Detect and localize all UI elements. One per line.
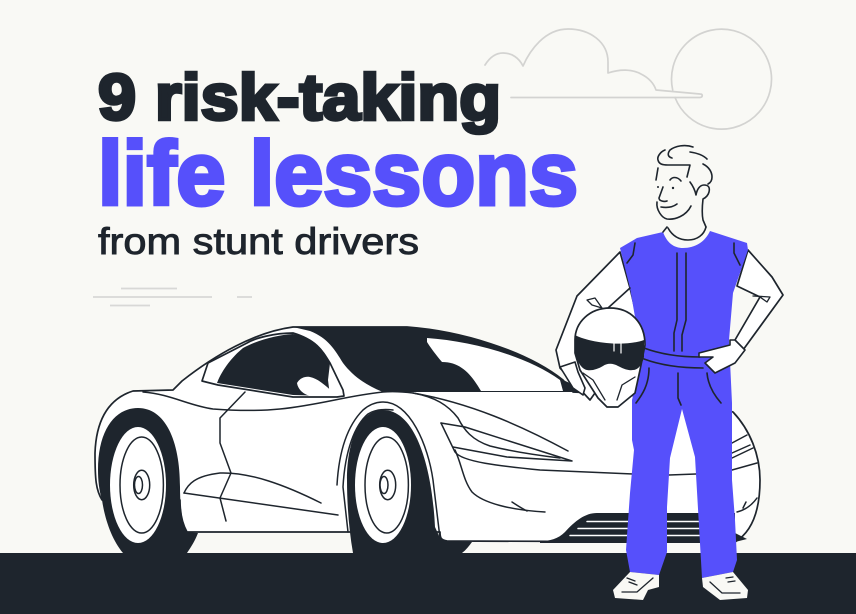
illustration: sports car xyxy=(95,327,760,553)
right arm xyxy=(735,250,783,350)
rear wheel xyxy=(98,408,198,553)
wing mirror xyxy=(297,377,337,396)
front wheel xyxy=(347,410,472,553)
car line details xyxy=(143,392,757,538)
right cuff xyxy=(753,296,770,302)
ground xyxy=(0,553,856,614)
right hand xyxy=(699,340,745,373)
title line 1: 9 risk-taking xyxy=(98,60,501,134)
left arm xyxy=(556,252,640,400)
left hand xyxy=(560,362,585,395)
racing suit xyxy=(620,231,748,578)
speed lines xyxy=(93,288,252,306)
helmet xyxy=(575,308,645,407)
suit seams xyxy=(608,243,740,405)
roof dark band xyxy=(293,327,590,392)
eyes xyxy=(657,186,674,189)
illustration: stunt driver xyxy=(556,146,783,600)
title line 3: from stunt drivers xyxy=(98,221,419,262)
icon: cloud and sun outline xyxy=(485,29,772,129)
left shoe xyxy=(613,572,659,600)
front grille xyxy=(540,513,735,543)
side window xyxy=(427,338,563,391)
title line 2: life lessons xyxy=(98,124,578,224)
helmet strap xyxy=(587,298,602,308)
windshield frame xyxy=(202,333,344,397)
right shoe xyxy=(702,572,748,600)
car body xyxy=(95,327,760,542)
rear bumper wedge xyxy=(735,533,747,542)
head and face xyxy=(656,146,712,240)
windshield glass xyxy=(217,334,330,396)
